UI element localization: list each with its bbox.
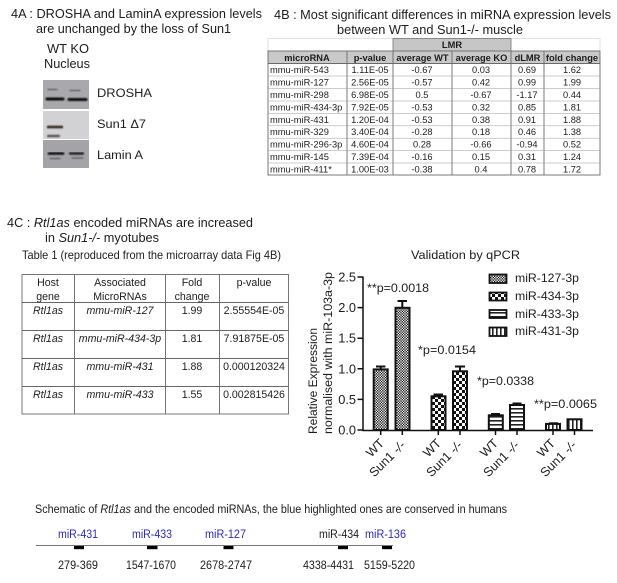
p-value annotations — [367, 281, 597, 411]
table: Rtl1as miRNAs: 0.000120324 — [223, 361, 285, 373]
miRNA names: miR-136 — [365, 527, 406, 541]
table: Rtl1as miRNAs: Host — [37, 277, 59, 289]
y tick labels: 0.0 — [338, 422, 356, 438]
table: Rtl1as miRNAs: 1.88 — [182, 361, 202, 373]
blot labels: Sun1 Δ7 — [97, 117, 146, 131]
table: miRNA differences: -0.57 — [411, 77, 433, 87]
miRNA names — [58, 527, 406, 541]
table: miRNA differences: -0.66 — [470, 140, 492, 150]
table: miRNA differences: LMR — [442, 40, 462, 50]
table: Rtl1as miRNAs: mmu-miR-431 — [86, 361, 154, 373]
table: miRNA differences: -0.28 — [411, 127, 433, 137]
table: miRNA differences: -0.67 — [470, 90, 492, 100]
table: miRNA differences: mmu-miR-145 — [270, 152, 329, 162]
table: miRNA differences: 0.42 — [472, 77, 490, 87]
table: Rtl1as miRNAs: mmu-miR-127 — [86, 305, 155, 317]
miRNA names: miR-433 — [132, 527, 172, 541]
schematic: Rtl1as gene map — [36, 527, 415, 572]
table: miRNA differences: average WT — [396, 53, 449, 63]
x tick labels: WT — [420, 436, 444, 460]
p-value annotations: *p=0.0154 — [418, 343, 476, 357]
heading: 4C: 4C : Rtl1as encoded miRNAs are increased — [7, 216, 253, 230]
y tick labels — [338, 270, 356, 438]
axes — [358, 276, 593, 435]
schematic caption: Schematic of Rtl1as and the encoded miRNAs, the blue highlighted ones are conserved in humans — [35, 502, 507, 516]
table: miRNA differences: 0.4 — [475, 164, 487, 174]
blot labels: DROSHA — [97, 86, 153, 100]
table: miRNA differences: microRNA — [284, 53, 330, 63]
table: miRNA differences: mmu-miR-543 — [270, 65, 329, 75]
table: Rtl1as miRNAs: 1.99 — [182, 305, 202, 317]
heading: 4B: between WT and Sun1-/- muscle — [337, 23, 523, 37]
table: miRNA differences: 0.52 — [563, 140, 581, 150]
table: Rtl1as miRNAs: Rtl1as — [33, 361, 64, 373]
blot: Sun1 delta 7 — [43, 111, 89, 139]
y axis label: Relative Expression — [306, 328, 320, 434]
table: Rtl1as miRNAs: gene — [36, 291, 60, 303]
blot labels — [97, 86, 153, 162]
heading: 4C: in Sun1-/- myotubes — [45, 231, 159, 245]
table: miRNA differences: 1.62 — [563, 65, 581, 75]
position ranges: 2678-2747 — [200, 558, 252, 572]
position ranges: 5159-5220 — [364, 558, 415, 572]
table: miRNA differences — [268, 38, 600, 175]
table: miRNA differences: 1.38 — [563, 127, 581, 137]
y tick labels: 1.5 — [338, 331, 356, 346]
table: miRNA differences: 1.72 — [563, 164, 581, 174]
table: Rtl1as miRNAs: MicroRNAs — [93, 291, 147, 303]
table: miRNA differences: 0.18 — [472, 127, 490, 137]
table: miRNA differences: 4.60E-04 — [351, 140, 389, 150]
table: Rtl1as miRNAs: mmu-miR-433 — [86, 389, 154, 401]
table: miRNA differences: 7.39E-04 — [351, 152, 389, 162]
table: miRNA differences: 1.20E-04 — [351, 115, 389, 125]
table: miRNA differences: 1.99 — [563, 77, 581, 87]
heading: 4A: 4A : DROSHA and LaminA expression levels — [11, 7, 262, 21]
table: miRNA differences: -0.16 — [411, 152, 433, 162]
bar chart: qPCR validation — [306, 270, 597, 480]
table: miRNA differences: 0.69 — [518, 65, 536, 75]
table: miRNA differences: 0.03 — [472, 65, 490, 75]
legend: miR-434-3p — [515, 289, 579, 303]
table: Rtl1as miRNAs: Rtl1as — [33, 333, 64, 345]
table: miRNA differences: 0.99 — [518, 77, 536, 87]
caption: Table 1: Table 1 (reproduced from the microarray data Fig 4B) — [22, 249, 281, 262]
heading: 4B: 4B : Most significant differences in miRNA expression levels — [274, 8, 611, 22]
heading: 4B — [274, 8, 611, 37]
table: miRNA differences: 7.92E-05 — [351, 102, 389, 112]
table: miRNA differences: fold change — [546, 53, 598, 63]
table: miRNA differences: -0.53 — [411, 115, 433, 125]
table: miRNA differences: mmu-miR-329 — [270, 127, 329, 137]
table: Rtl1as miRNAs: Fold — [182, 277, 202, 289]
table: miRNA differences: 2.56E-05 — [351, 77, 389, 87]
table: miRNA differences: 1.81 — [563, 102, 581, 112]
bars: miR-431-3p — [546, 419, 582, 430]
table: Rtl1as miRNAs: Rtl1as — [33, 305, 64, 317]
heading: 4C — [7, 216, 253, 245]
table: miRNA differences: dLMR — [515, 53, 541, 63]
x tick labels: Sun1 -/- — [424, 438, 465, 480]
table: miRNA differences: 0.46 — [518, 127, 536, 137]
y tick labels: 1.0 — [338, 361, 356, 376]
table: miRNA differences: -0.94 — [516, 140, 538, 150]
blot: Lamin A — [43, 140, 89, 168]
x tick labels: Sun1 -/- — [538, 438, 579, 480]
miRNA names: miR-127 — [205, 527, 246, 541]
x tick labels: Sun1 -/- — [367, 438, 408, 480]
x tick labels: WT — [477, 436, 501, 460]
y tick labels: 2.0 — [338, 300, 356, 315]
table: miRNA differences: -0.53 — [411, 102, 433, 112]
miRNA names: miR-434 — [319, 527, 359, 541]
table: Rtl1as miRNAs: change — [175, 291, 209, 303]
table: miRNA differences: p-value — [354, 53, 386, 63]
y tick labels: 0.5 — [338, 392, 356, 407]
heading: 4A: are unchanged by the loss of Sun1 — [36, 22, 231, 36]
table: Rtl1as miRNAs: 1.81 — [182, 333, 202, 345]
legend: miR-433-3p — [515, 307, 579, 321]
table: Rtl1as miRNAs: 1.55 — [182, 389, 202, 401]
bars: miR-434-3p — [432, 366, 467, 430]
table: miRNA differences: mmu-miR-411* — [270, 164, 332, 174]
chart title: Validation by qPCR — [411, 248, 520, 262]
table: miRNA differences: average KO — [456, 53, 507, 63]
y tick labels: 2.5 — [338, 270, 356, 284]
table: miRNA differences: 0.38 — [472, 115, 490, 125]
table: miRNA differences: 0.78 — [518, 164, 536, 174]
table: miRNA differences: 0.28 — [413, 140, 431, 150]
table: miRNA differences: 0.5 — [416, 90, 428, 100]
legend — [490, 271, 579, 338]
table: miRNA differences: 0.44 — [563, 90, 581, 100]
table: miRNA differences: 0.31 — [518, 152, 536, 162]
table: Rtl1as miRNAs: p-value — [237, 277, 271, 289]
position ranges — [58, 558, 415, 572]
table: miRNA differences: mmu-miR-434-3p — [270, 102, 342, 112]
heading: 4A — [11, 7, 262, 36]
x tick labels: WT — [534, 436, 558, 460]
y axis label — [306, 272, 335, 434]
table: Rtl1as miRNAs: Associated — [94, 277, 146, 289]
table: miRNA differences: -1.17 — [516, 90, 538, 100]
p-value annotations: **p=0.0018 — [367, 281, 429, 295]
position ranges: 279-369 — [58, 558, 98, 572]
table: Rtl1as miRNAs: mmu-miR-434-3p — [79, 333, 161, 345]
table: miRNA differences: 0.85 — [518, 102, 536, 112]
western blot panel — [43, 42, 153, 168]
x tick labels: Sun1 -/- — [481, 438, 522, 480]
table: miRNA differences: 0.32 — [472, 102, 490, 112]
table: miRNA differences: 3.40E-04 — [351, 127, 389, 137]
table: miRNA differences: 1.88 — [563, 115, 581, 125]
gene line — [36, 544, 393, 546]
x tick labels — [363, 436, 579, 480]
table: Rtl1as miRNAs: Rtl1as — [33, 389, 64, 401]
lane labels: Nucleus — [44, 57, 90, 71]
miRNA names: miR-431 — [58, 527, 98, 541]
table: miRNA differences: 6.98E-05 — [351, 90, 389, 100]
table: Rtl1as miRNAs: 0.002815426 — [223, 389, 285, 401]
table: miRNA differences: 1.00E-03 — [351, 164, 389, 174]
table: Rtl1as miRNAs: 7.91875E-05 — [224, 333, 284, 345]
table: miRNA differences: mmu-miR-127 — [270, 77, 329, 87]
table: miRNA differences: mmu-miR-298 — [270, 90, 329, 100]
table: miRNA differences: mmu-miR-296-3p — [270, 140, 342, 150]
y axis label: normalised with miR-103a-3p — [321, 272, 335, 434]
blot labels: Lamin A — [97, 148, 144, 162]
position ranges: 4338-4431 — [303, 558, 354, 572]
table: miRNA differences: -0.67 — [411, 65, 433, 75]
table: Rtl1as miRNAs — [22, 274, 288, 414]
p-value annotations: *p=0.0338 — [477, 374, 534, 388]
table: miRNA differences: 0.91 — [518, 115, 536, 125]
miRNA position marks — [74, 546, 392, 549]
table: miRNA differences: 1.11E-05 — [351, 65, 389, 75]
table: miRNA differences: mmu-miR-431 — [270, 115, 329, 125]
blot: DROSHA — [43, 80, 89, 109]
table: miRNA differences: -0.38 — [411, 164, 433, 174]
bars: miR-433-3p — [489, 404, 524, 430]
table: miRNA differences: 0.15 — [472, 152, 490, 162]
legend: miR-431-3p — [515, 324, 579, 338]
legend: miR-127-3p — [515, 271, 579, 285]
position ranges: 1547-1670 — [126, 558, 176, 572]
p-value annotations: **p=0.0065 — [534, 397, 597, 411]
bars: miR-127-3p — [374, 301, 410, 430]
table: miRNA differences: 1.24 — [563, 152, 581, 162]
lane labels: WT KO — [47, 42, 89, 56]
lane labels — [44, 42, 90, 71]
table: Rtl1as miRNAs: 2.55554E-05 — [224, 305, 284, 317]
x tick labels: WT — [363, 436, 387, 460]
